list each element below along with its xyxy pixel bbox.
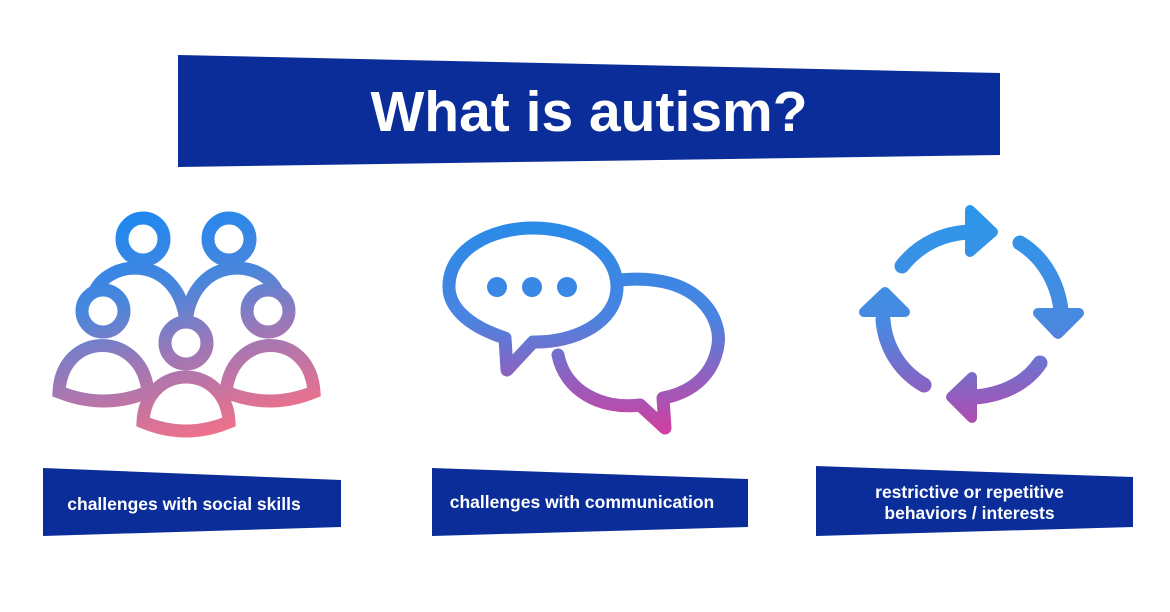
- label: social skills: challenges with social skills: [67, 494, 301, 514]
- icon: speech bubbles: [442, 222, 725, 434]
- title banner: [178, 55, 1000, 167]
- label: repetitive behaviors: behaviors / interests: [884, 503, 1055, 523]
- label: communication: [432, 468, 748, 536]
- label: social skills: [43, 468, 341, 536]
- label: repetitive behaviors: [816, 466, 1133, 536]
- icon: cycle arrows: [859, 205, 1084, 423]
- icon: group of people: [52, 212, 321, 438]
- label: repetitive behaviors: restrictive or repetitive: [875, 482, 1064, 502]
- title banner: What is autism?: [370, 80, 808, 144]
- label: communication: challenges with communication: [450, 492, 714, 512]
